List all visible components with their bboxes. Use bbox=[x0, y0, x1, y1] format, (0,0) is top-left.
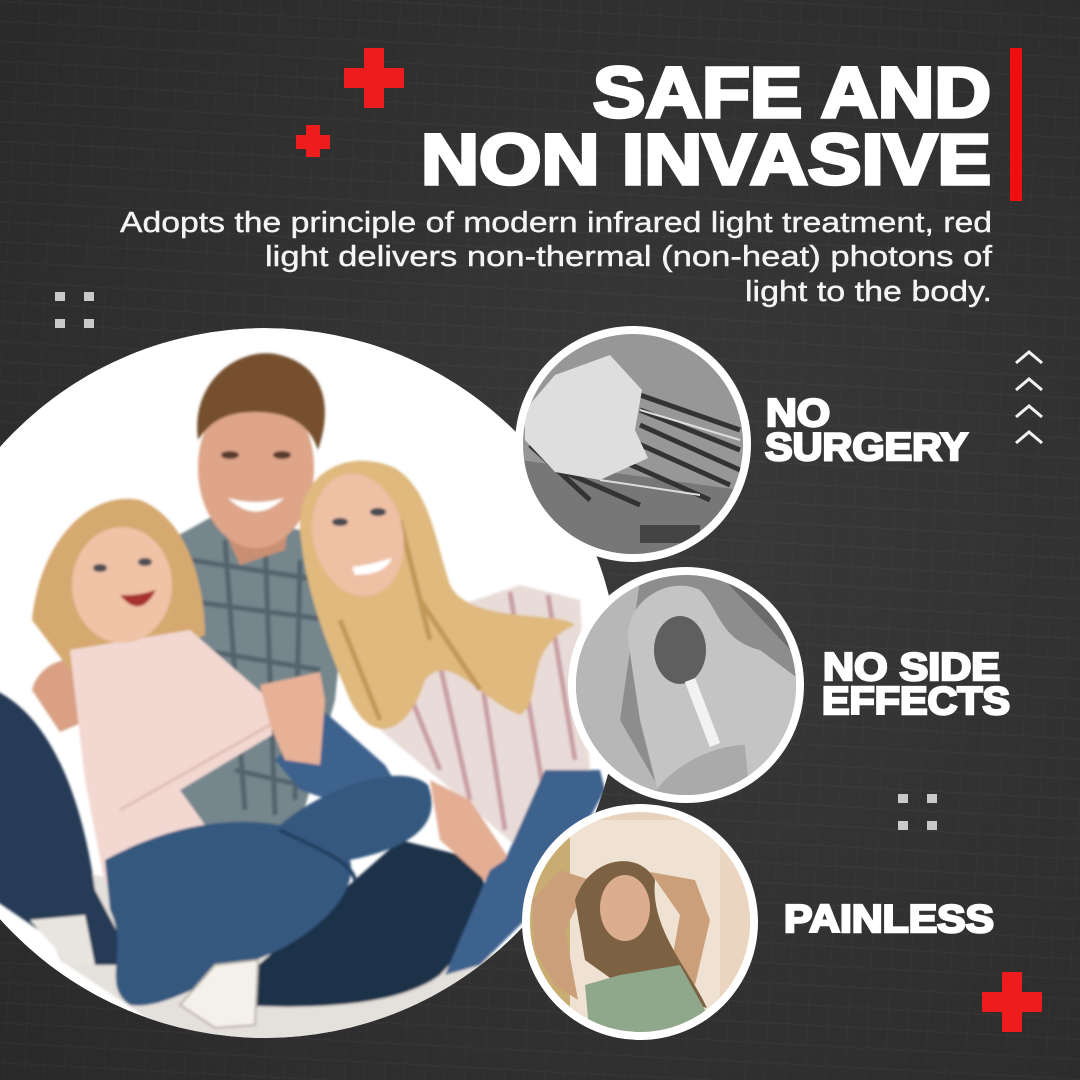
girl's shoe bbox=[180, 960, 258, 1028]
plaid lines bbox=[191, 540, 320, 816]
woman's arm bbox=[430, 780, 510, 885]
girl's hair bbox=[32, 499, 205, 670]
icon: dots top left bbox=[55, 292, 94, 328]
woman's face bbox=[311, 472, 406, 598]
title: SAFE AND bbox=[593, 54, 991, 133]
man's left leg bbox=[0, 685, 135, 965]
girl's sweater bbox=[70, 630, 272, 885]
photo circle: painless bbox=[522, 804, 760, 1040]
label: no surgery bbox=[765, 392, 968, 469]
main circle: family photo bbox=[0, 328, 620, 1040]
icon: small red cross top bbox=[296, 125, 330, 157]
description text: Adopts the principle of modern infrared light treatment, red bbox=[120, 207, 992, 239]
icon: red cross bottom right bbox=[982, 972, 1042, 1032]
label: no side effects: EFFECTS bbox=[822, 680, 1010, 723]
label: no surgery: NO bbox=[766, 392, 830, 435]
girl's face bbox=[72, 527, 172, 643]
man's torso plaid shirt bbox=[178, 516, 340, 826]
photo circle: no surgery bbox=[515, 326, 751, 562]
label: painless: PAINLESS bbox=[784, 898, 994, 941]
girl's hands bbox=[260, 672, 325, 765]
icon: large red cross top bbox=[344, 48, 404, 108]
girl's jeans bbox=[105, 776, 432, 1006]
icon: dots lower right bbox=[898, 794, 937, 830]
man's arm bbox=[30, 659, 80, 734]
description text bbox=[120, 207, 993, 308]
woman's hair bbox=[300, 461, 575, 729]
description text: light delivers non-thermal (non-heat) photons of bbox=[265, 241, 993, 273]
title bbox=[421, 54, 991, 200]
man's hair bbox=[197, 353, 325, 450]
woman's shirt bbox=[380, 585, 590, 850]
title: NON INVASIVE bbox=[421, 121, 991, 200]
man's lower jeans bbox=[230, 840, 490, 1007]
label: no side effects bbox=[822, 646, 1010, 723]
woman's jeans bbox=[275, 712, 605, 975]
man's shoe bbox=[30, 915, 95, 965]
hair bbox=[575, 861, 707, 1008]
label: no side effects: NO SIDE bbox=[823, 646, 1000, 689]
arms bbox=[532, 870, 710, 1000]
red accent bar bbox=[1010, 48, 1022, 201]
man's smile bbox=[228, 498, 284, 512]
man's neck and face bbox=[227, 536, 288, 566]
description text: light to the body. bbox=[745, 276, 992, 308]
label: no surgery: SURGERY bbox=[765, 426, 968, 469]
photo circle: no side effects bbox=[568, 567, 804, 803]
icon: up chevrons bbox=[1016, 352, 1042, 443]
floor bbox=[56, 872, 494, 1038]
